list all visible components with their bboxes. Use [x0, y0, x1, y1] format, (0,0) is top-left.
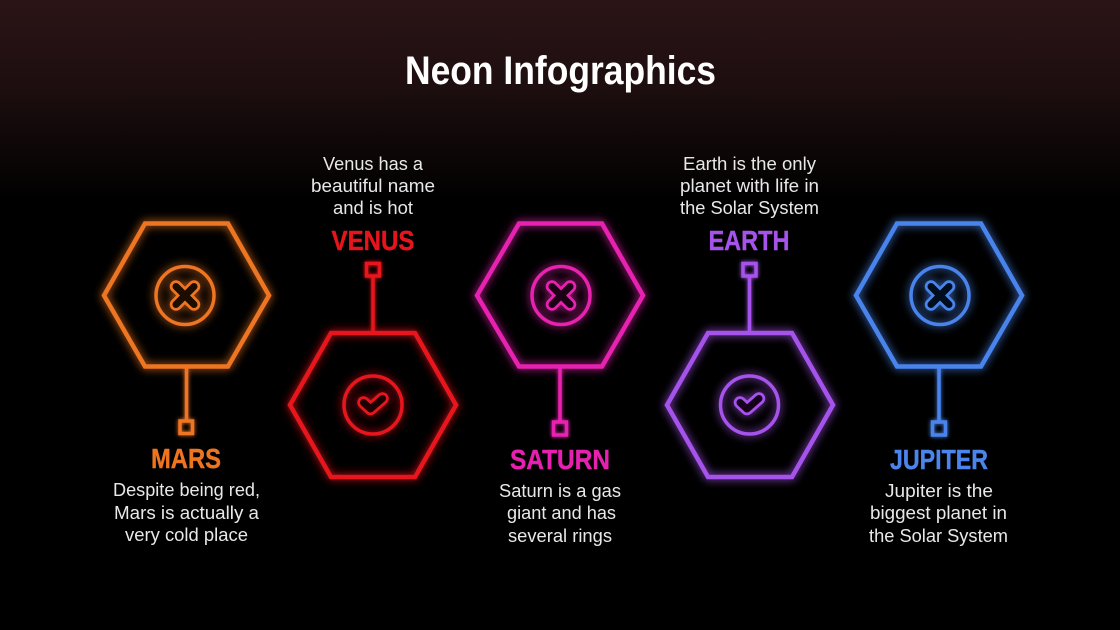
text: Mars description: very cold place — [125, 525, 248, 545]
text: Venus description: Venus has a — [323, 154, 424, 174]
heading: Saturn: SATURN — [510, 444, 610, 475]
panel: Saturn — [477, 224, 643, 546]
text: Jupiter description: biggest planet in — [870, 503, 1007, 523]
text: Mars description: Despite being red, — [113, 480, 260, 500]
text: Mars description: Mars is actually a — [114, 503, 260, 523]
connector: Earth — [743, 264, 756, 332]
text: Venus description: beautiful name — [311, 176, 435, 196]
text: Saturn description: Saturn is a gas — [499, 481, 621, 501]
text: Jupiter description: the Solar System — [869, 526, 1008, 546]
text: Earth description: the Solar System — [680, 198, 819, 218]
connector: Saturn — [554, 368, 566, 435]
text: Jupiter description — [869, 481, 1008, 546]
heading: Jupiter: JUPITER — [890, 444, 988, 475]
panel: Venus — [290, 154, 456, 477]
connector: Mars — [180, 368, 192, 434]
icon: Mars hexagon with cross — [104, 224, 269, 366]
text: Venus description — [311, 154, 435, 218]
text: Saturn description: several rings — [508, 526, 612, 546]
text: Saturn description: giant and has — [507, 503, 616, 523]
panel: Earth — [667, 154, 833, 477]
text: Earth description — [680, 154, 819, 218]
icon: Earth hexagon with check — [667, 333, 833, 477]
icon: Saturn hexagon with cross — [477, 224, 643, 366]
heading: Venus: VENUS — [332, 225, 414, 256]
connector: Venus — [366, 264, 380, 332]
heading: Earth: EARTH — [708, 225, 790, 256]
heading: Mars: MARS — [151, 443, 221, 474]
text: Mars description — [113, 480, 260, 545]
text: Earth description: Earth is the only — [683, 154, 816, 174]
connector: Jupiter — [932, 368, 946, 435]
panel: Mars — [104, 224, 269, 545]
icon: Venus hexagon with check — [290, 333, 456, 477]
text: Earth description: planet with life in — [680, 176, 819, 196]
panel: Jupiter — [856, 224, 1022, 546]
text: Venus description: and is hot — [333, 198, 413, 218]
title: Neon Infographics — [405, 49, 716, 93]
text: Jupiter description: Jupiter is the — [885, 481, 993, 501]
text: Saturn description — [499, 481, 621, 546]
icon: Jupiter hexagon with cross — [856, 224, 1022, 366]
